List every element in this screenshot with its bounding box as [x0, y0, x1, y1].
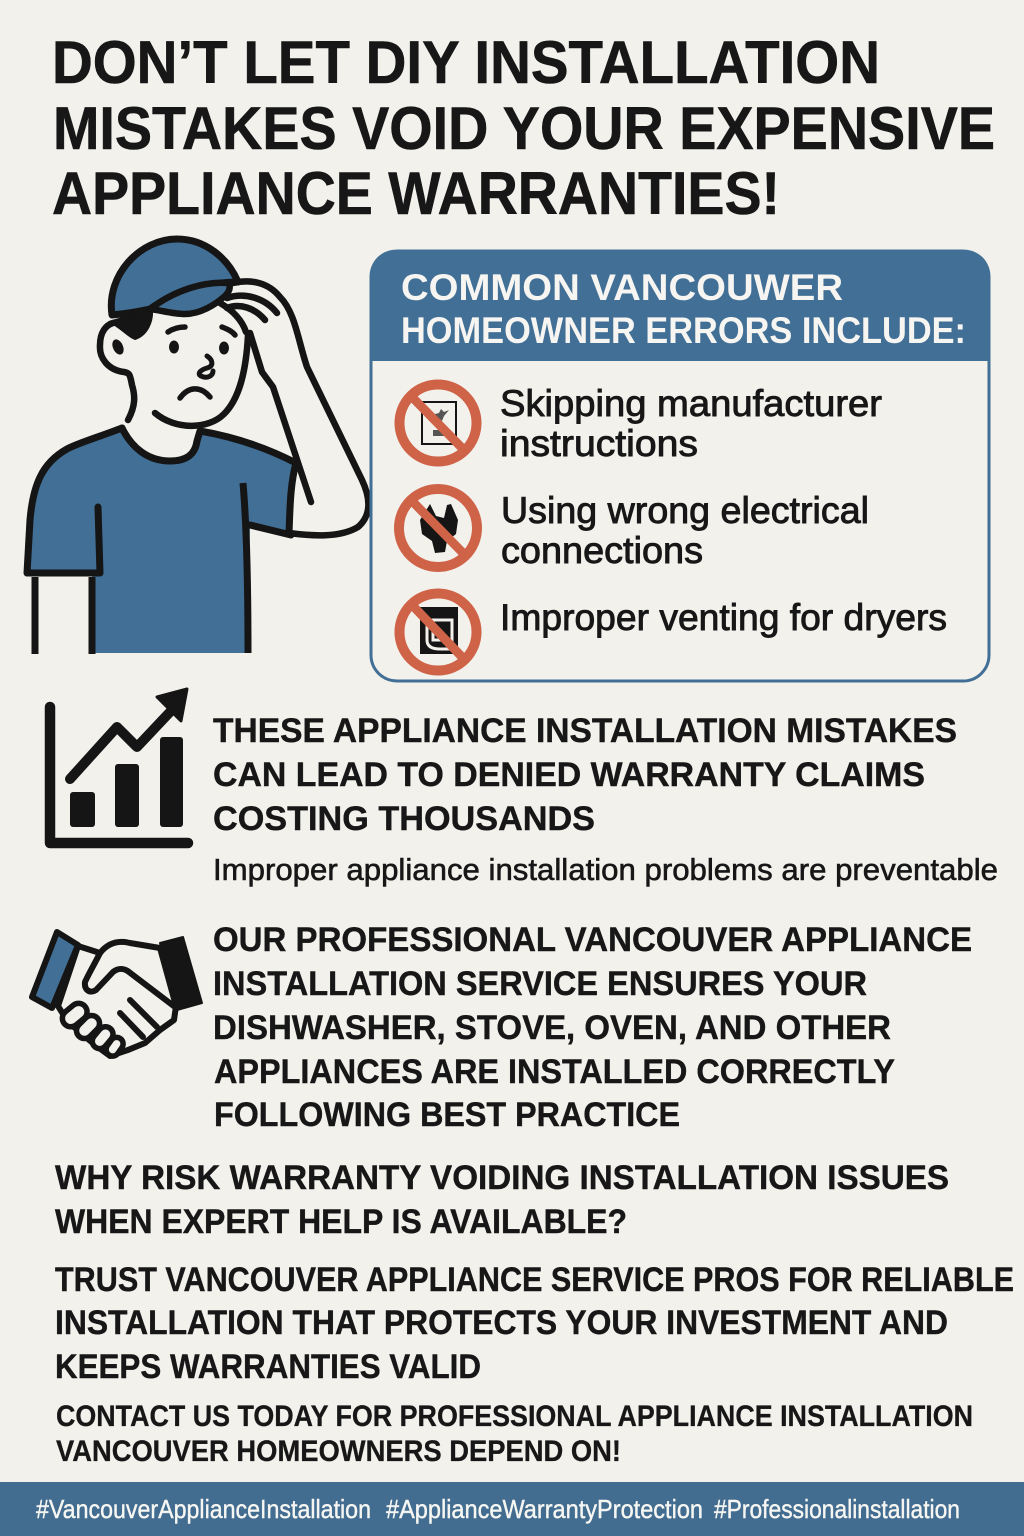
ear [110, 338, 126, 356]
error text: instructions: instructions [500, 423, 698, 464]
head outline [100, 303, 248, 426]
text: professional installation service: DISHWASHER, STOVE, OVEN, AND OTHER [213, 1009, 891, 1047]
title: APPLIANCE WARRANTIES! [52, 160, 780, 227]
text: professional installation service: FOLLOWING BEST PRACTICE [214, 1096, 680, 1134]
t-shirt [27, 428, 297, 653]
footer hashtag bar [0, 1482, 1024, 1536]
text: trust: KEEPS WARRANTIES VALID [55, 1348, 481, 1386]
text: denied warranty claims: CAN LEAD TO DENIED WARRANTY CLAIMS [213, 756, 925, 794]
panel heading: HOMEOWNER ERRORS INCLUDE: [401, 310, 966, 351]
icon: no dryer vent [400, 594, 476, 670]
error text: electrical: Using wrong electrical [501, 490, 869, 531]
text: trust [55, 1261, 1014, 1386]
text: denied warranty claims: COSTING THOUSANDS [213, 800, 595, 838]
icon: no wrong plug [399, 489, 477, 567]
error text: venting: Improper venting for dryers [500, 597, 947, 638]
text: denied warranty claims [213, 712, 957, 838]
text: why risk: WHEN EXPERT HELP IS AVAILABLE? [55, 1203, 627, 1241]
text: preventable problems: Improper appliance installation problems are preventable [213, 852, 998, 887]
text: trust: INSTALLATION THAT PROTECTS YOUR INVESTMENT AND [55, 1304, 948, 1342]
illustration: worried homeowner [27, 239, 368, 654]
hair [109, 309, 152, 339]
panel heading [401, 267, 966, 351]
error text: instructions [500, 383, 882, 464]
text: why risk: WHY RISK WARRANTY VOIDING INSTALLATION ISSUES [55, 1159, 949, 1197]
footer hashtag bar: #ApplianceWarrantyProtection [386, 1494, 703, 1524]
footer hashtag bar: #Professionalinstallation [714, 1494, 960, 1524]
text: professional installation service: APPLIANCES ARE INSTALLED CORRECTLY [214, 1053, 895, 1091]
title: DON’T LET DIY INSTALLATION [52, 29, 880, 96]
text: professional installation service: OUR PROFESSIONAL VANCOUVER APPLIANCE [213, 921, 972, 959]
icon: rising bar chart [50, 689, 188, 843]
text: professional installation service [213, 921, 972, 1134]
text: denied warranty claims: THESE APPLIANCE INSTALLATION MISTAKES [213, 712, 957, 750]
text: contact call to action [56, 1400, 973, 1468]
footer hashtag bar: #VancouverApplianceInstallation [36, 1494, 371, 1524]
text: contact call to action: VANCOUVER HOMEOWNERS DEPEND ON! [56, 1435, 621, 1468]
text: why risk [55, 1159, 949, 1241]
arm and hand [233, 281, 368, 535]
arm outlines [227, 281, 368, 535]
cap [111, 239, 238, 315]
panel body [371, 251, 989, 681]
shirt outlines [27, 428, 296, 654]
error text: electrical [501, 490, 869, 571]
error text: instructions: Skipping manufacturer [500, 383, 882, 424]
panel header [370, 250, 990, 361]
icon: handshake [32, 932, 202, 1059]
face [168, 327, 235, 398]
title [52, 29, 995, 227]
panel: common homeowner errors [370, 250, 990, 681]
icon: no manual [400, 384, 476, 462]
panel heading: COMMON VANCOUWER [401, 267, 843, 308]
cap brim [150, 283, 230, 314]
text: professional installation service: INSTALLATION SERVICE ENSURES YOUR [213, 965, 867, 1003]
error text: electrical: connections [501, 530, 703, 571]
